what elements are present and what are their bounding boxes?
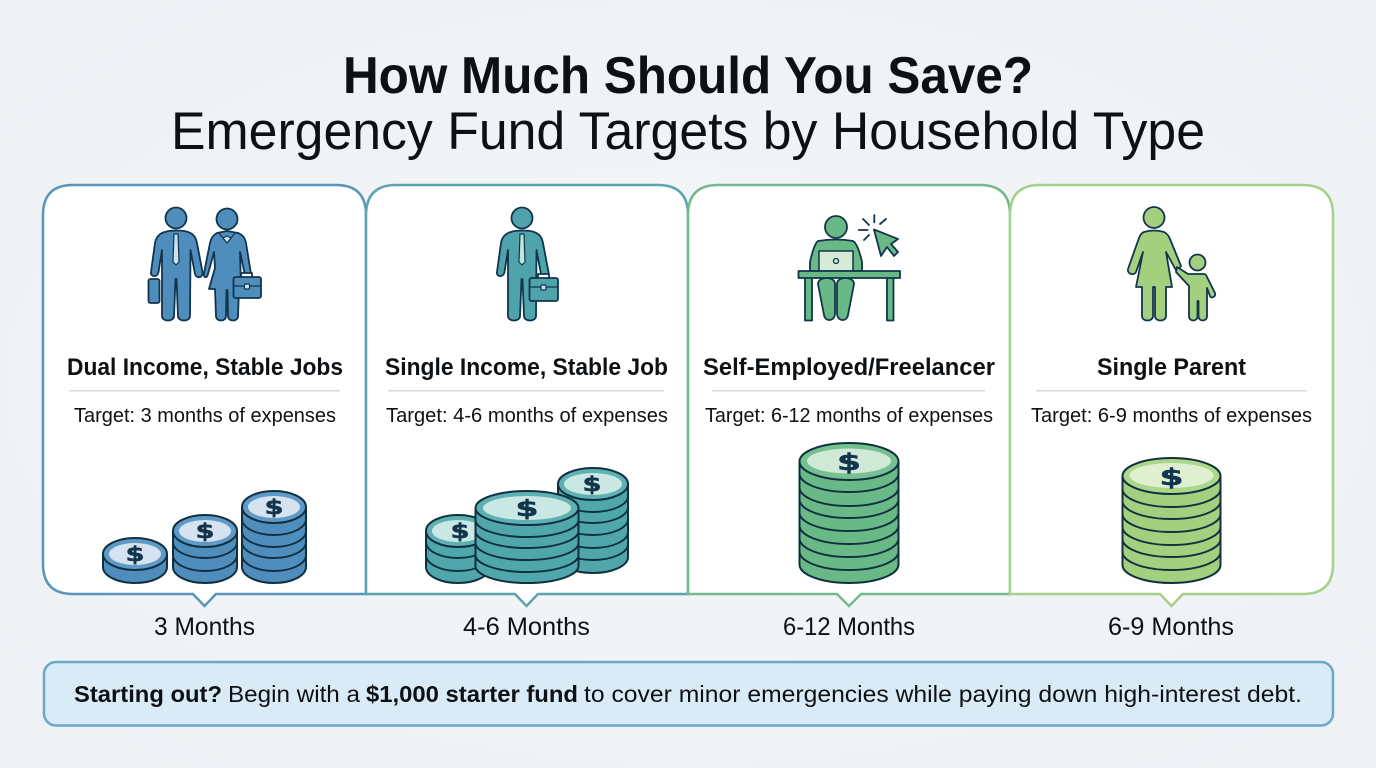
label: 3 months: 3 Months [154,613,255,641]
title [171,47,1205,161]
callout: starter fund [44,662,1333,726]
title: Emergency Fund Targets by Household Type [171,102,1205,161]
panel: single income [366,185,688,606]
target: dual income: Target: 3 months of expenses [74,405,336,427]
icon: working couple [148,208,261,320]
card outline: single parent [1010,185,1333,606]
coin stack: seven: $ [1160,465,1184,491]
heading: dual income: Dual Income, Stable Jobs [67,354,343,381]
coin stacks: overlapping three: $ [582,472,602,496]
heading: single income: Single Income, Stable Job [385,354,668,381]
coin stacks: overlapping three: $ [450,519,470,543]
target: single income: Target: 4-6 months of expenses [386,405,668,427]
coin stacks: overlapping three: $ [516,497,538,522]
callout: starter fund: Starting out? [74,681,222,707]
label: 6-9 months: 6-9 Months [1108,613,1234,641]
icon: single worker [497,208,558,320]
label: 6-12 months: 6-12 Months [783,613,915,641]
callout: starter fund: $1,000 starter fund [366,681,578,707]
coin stacks: rising three: $ [264,495,284,519]
icon: parent and child [1128,207,1215,320]
panel: single parent [1010,185,1333,606]
panel: dual income [43,185,366,606]
card outline: self-employed [688,185,1010,606]
target: single parent: Target: 6-9 months of expenses [1031,405,1312,427]
coin stacks: rising three: $ [126,542,144,566]
coin stacks: rising three [103,491,306,583]
callout: starter fund: to cover minor emergencies while paying down high-interest debt. [584,681,1302,707]
icon: freelancer at laptop [798,215,900,320]
panel: self-employed [688,185,1010,606]
coin stacks: rising three: $ [196,519,214,543]
heading: self-employed: Self-Employed/Freelancer [703,354,995,381]
target: self-employed: Target: 6-12 months of expenses [705,405,993,427]
coin stack: tall eight: $ [837,450,861,476]
coin stack: seven [1122,458,1220,583]
label: 4-6 months: 4-6 Months [463,613,590,641]
title: How Much Should You Save? [343,47,1033,105]
heading: single parent: Single Parent [1097,354,1246,381]
card outline: dual income [43,185,366,606]
callout: starter fund: Begin with a [228,681,360,707]
coin stacks: overlapping three [426,468,628,583]
coin stack: tall eight [800,443,898,583]
card outline: single income [366,185,688,606]
